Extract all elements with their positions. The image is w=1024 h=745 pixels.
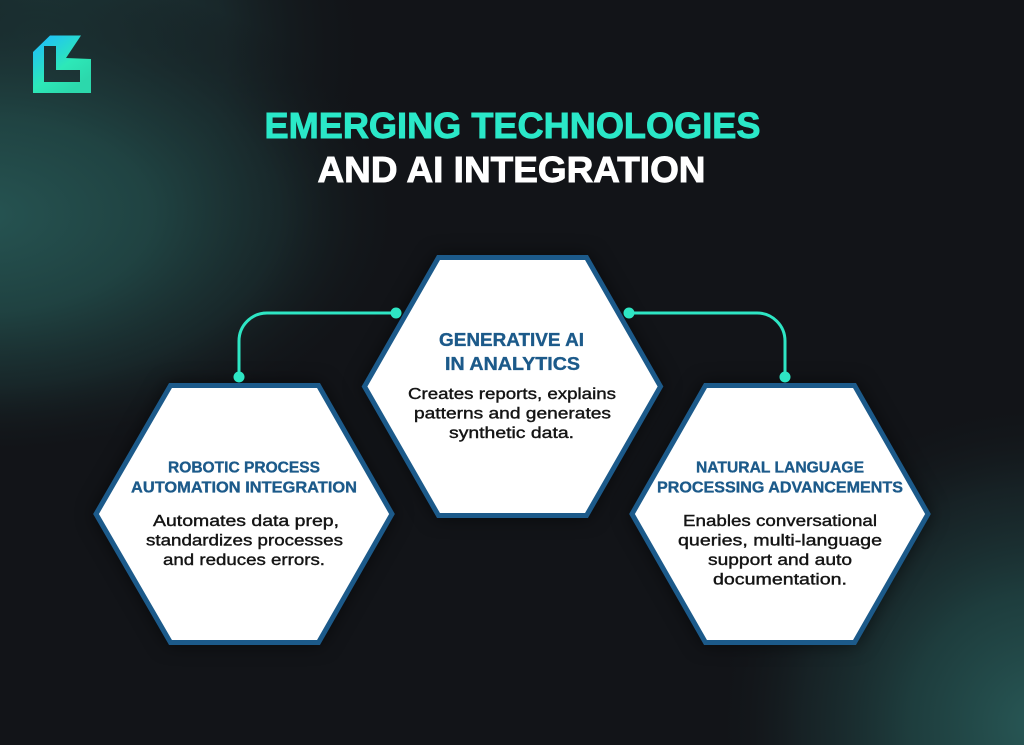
body text bbox=[146, 513, 343, 569]
panel: generative AI bbox=[364, 258, 660, 516]
heading bbox=[439, 330, 584, 374]
heading bbox=[131, 460, 357, 496]
title bbox=[264, 105, 760, 190]
heading: IN ANALYTICS bbox=[445, 354, 580, 374]
body text: Enables conversational bbox=[683, 513, 877, 530]
body text: support and auto bbox=[708, 552, 852, 569]
right connector arrow bbox=[624, 308, 790, 382]
body text: and reduces errors. bbox=[163, 552, 325, 569]
body text: Automates data prep, bbox=[153, 513, 339, 530]
body text: Creates reports, explains bbox=[408, 386, 616, 403]
heading: PROCESSING ADVANCEMENTS bbox=[657, 480, 903, 496]
heading: GENERATIVE AI bbox=[439, 330, 584, 350]
panel: natural language processing bbox=[632, 386, 928, 642]
title line 2: AND AI INTEGRATION bbox=[318, 149, 706, 190]
body text: documentation. bbox=[713, 572, 847, 588]
left connector arrow bbox=[234, 308, 402, 382]
heading: NATURAL LANGUAGE bbox=[696, 460, 864, 476]
hexagon bbox=[96, 386, 392, 642]
body text: standardizes processes bbox=[146, 532, 343, 550]
logo icon bbox=[33, 36, 91, 93]
body text bbox=[678, 513, 882, 588]
title line 1: EMERGING TECHNOLOGIES bbox=[264, 105, 760, 146]
body text: patterns and generates bbox=[414, 406, 611, 422]
body text bbox=[408, 386, 616, 442]
body text: queries, multi-language bbox=[678, 532, 882, 550]
hexagon bbox=[364, 258, 660, 516]
heading bbox=[657, 460, 903, 496]
panel: robotic process automation bbox=[96, 386, 392, 642]
heading: AUTOMATION INTEGRATION bbox=[131, 480, 357, 496]
heading: ROBOTIC PROCESS bbox=[168, 460, 320, 476]
body text: synthetic data. bbox=[449, 425, 574, 442]
hexagon bbox=[632, 386, 928, 642]
